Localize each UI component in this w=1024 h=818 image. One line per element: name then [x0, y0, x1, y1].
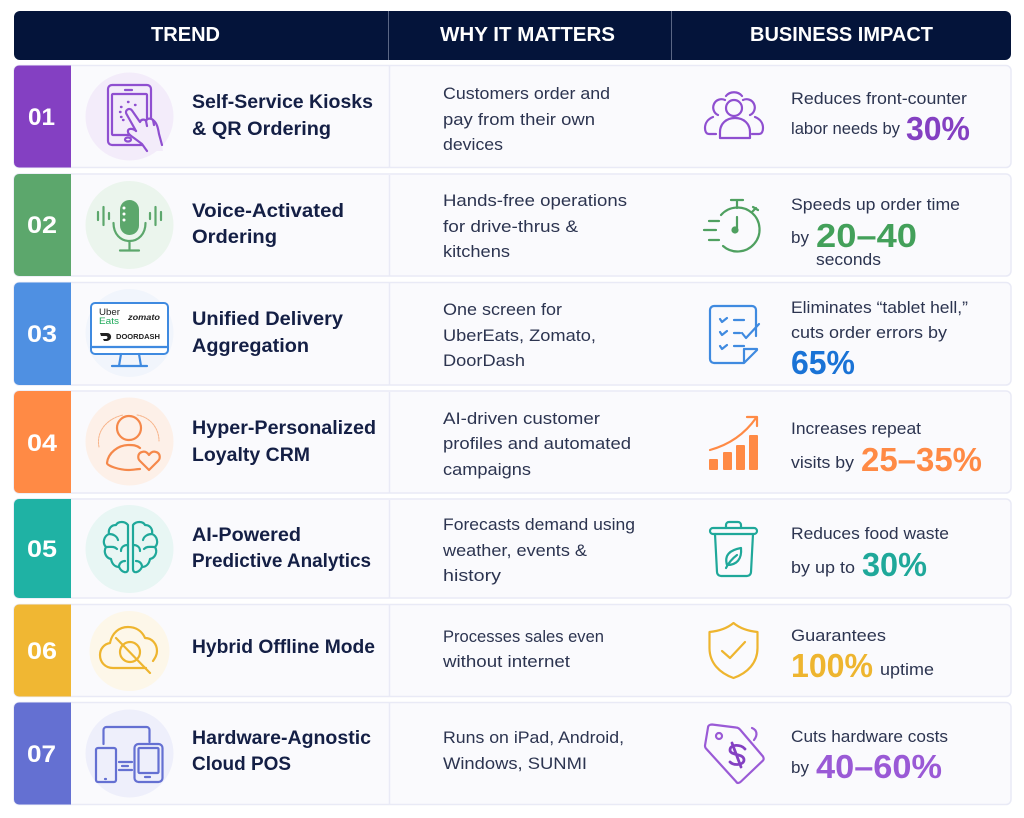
panel: row 02 voice-activated ordering: kitchens [443, 242, 510, 261]
panel: row 05 predictive analytics: AI-Powered [192, 524, 301, 546]
panel: row 03 unified delivery aggregation: Eliminates “tablet hell,” [791, 299, 968, 317]
panel: row 04 hyper-personalized loyalty: campaigns [443, 460, 531, 479]
panel: row 07 hardware-agnostic cloud pos: 40–60% [816, 748, 942, 785]
panel: row 06 hybrid offline mode: without internet [442, 652, 570, 671]
panel: row 03 unified delivery aggregation: DoorDash [443, 351, 525, 370]
panel: row 06 hybrid offline mode [14, 604, 1011, 696]
panel: row 04 hyper-personalized loyalty: Hyper-Personalized [192, 417, 376, 439]
panel: row 04 hyper-personalized loyalty: AI-driven customer [443, 409, 600, 428]
panel: row 03 unified delivery aggregation: 65% [791, 344, 855, 381]
panel: row 04 hyper-personalized loyalty: 04 [27, 430, 58, 457]
icon: trash bin with leaf [710, 522, 757, 576]
panel: row 06 hybrid offline mode: Guarantees [791, 627, 886, 645]
panel: row 05 predictive analytics: Predictive Analytics [192, 550, 371, 572]
icon: price tag with dollar [705, 724, 764, 783]
panel: row 04 hyper-personalized loyalty: profiles and automated [443, 434, 631, 453]
panel: row 02 voice-activated ordering: Ordering [192, 226, 277, 248]
panel: row 07 hardware-agnostic cloud pos: Windows, SUNMI [443, 754, 587, 773]
icon: customer with heart [86, 398, 174, 486]
panel: row 03 unified delivery aggregation: Unified Delivery [192, 308, 343, 330]
panel: row 05 predictive analytics: history [443, 566, 502, 585]
panel: row 04 hyper-personalized loyalty: 25–35% [861, 441, 982, 478]
header bar: TREND [151, 24, 220, 46]
panel: row 02 voice-activated ordering [14, 174, 1011, 276]
icon: microphone [86, 181, 174, 269]
panel: row 06 hybrid offline mode: Hybrid Offline Mode [192, 636, 375, 658]
panel: row 03 unified delivery aggregation: cuts order errors by [791, 324, 948, 342]
panel: row 05 predictive analytics: Forecasts demand using [443, 515, 635, 534]
panel: row 02 voice-activated ordering: by [791, 229, 810, 247]
icon: devices [86, 710, 174, 798]
panel: row 01 self-service kiosks: & QR Ordering [192, 118, 331, 140]
panel: row 03 unified delivery aggregation: One screen for [443, 300, 562, 319]
panel: row 04 hyper-personalized loyalty: Increases repeat [791, 420, 921, 438]
icon: monitor with delivery apps: Uber [99, 307, 120, 318]
icon: monitor with delivery apps: Eats [99, 316, 119, 327]
panel: row 03 unified delivery aggregation: Aggregation [192, 335, 309, 357]
icon: checklist [710, 306, 759, 363]
panel: row 01 self-service kiosks: Self-Service Kiosks [192, 91, 373, 113]
panel: row 02 voice-activated ordering: for drive-thrus & [443, 217, 579, 236]
header bar: WHY IT MATTERS [440, 24, 615, 46]
panel: row 05 predictive analytics: Reduces food waste [791, 525, 949, 543]
panel: row 01 self-service kiosks: 01 [28, 104, 55, 131]
panel: row 05 predictive analytics: weather, events & [442, 541, 588, 560]
panel: row 07 hardware-agnostic cloud pos: Cuts hardware costs [791, 728, 948, 746]
icon: growth bar chart [709, 417, 758, 470]
panel: row 07 hardware-agnostic cloud pos: by [791, 759, 810, 777]
panel: row 04 hyper-personalized loyalty [14, 391, 1011, 493]
panel: row 06 hybrid offline mode: Processes sales even [443, 627, 604, 646]
panel: row 02 voice-activated ordering: 02 [27, 212, 57, 239]
panel: row 01 self-service kiosks: pay from their own [443, 110, 595, 129]
panel: row 02 voice-activated ordering: Hands-free operations [443, 191, 627, 210]
panel: row 07 hardware-agnostic cloud pos: Cloud POS [192, 753, 291, 775]
panel: row 05 predictive analytics: 05 [27, 536, 57, 563]
panel: row 06 hybrid offline mode: 06 [27, 638, 57, 665]
icon: monitor with delivery apps: zomato [127, 312, 160, 322]
panel: row 05 predictive analytics: 30% [862, 546, 927, 583]
panel: row 07 hardware-agnostic cloud pos: Hardware-Agnostic [192, 727, 371, 749]
panel: row 03 unified delivery aggregation [14, 282, 1011, 385]
header bar [14, 11, 1011, 60]
panel: row 06 hybrid offline mode: uptime [880, 661, 934, 679]
panel: row 02 voice-activated ordering: Voice-Activated [192, 200, 344, 222]
panel: row 01 self-service kiosks: Reduces front-counter [791, 90, 968, 108]
panel: row 06 hybrid offline mode: 100% [791, 647, 873, 684]
icon: tablet with tapping hand [86, 72, 174, 160]
panel: row 04 hyper-personalized loyalty: visits by [791, 454, 855, 472]
panel: row 03 unified delivery aggregation: UberEats, Zomato, [443, 326, 596, 345]
panel: row 01 self-service kiosks: 30% [906, 110, 970, 147]
panel: row 01 self-service kiosks [14, 66, 1011, 168]
icon: shield with check [710, 623, 758, 678]
panel: row 07 hardware-agnostic cloud pos: 07 [27, 741, 56, 768]
panel: row 05 predictive analytics: by up to [791, 559, 855, 577]
icon: monitor with delivery apps: DOORDASH [116, 332, 160, 341]
panel: row 02 voice-activated ordering: 20–40 [816, 217, 917, 254]
panel: row 02 voice-activated ordering: Speeds up order time [791, 196, 960, 214]
icon: brain [86, 505, 174, 593]
panel: row 04 hyper-personalized loyalty: Loyalty CRM [192, 444, 310, 466]
panel: row 01 self-service kiosks: Customers order and [443, 84, 610, 103]
panel: row 01 self-service kiosks: devices [443, 135, 503, 154]
icon: cloud with crossed-out connection [90, 611, 170, 691]
panel: row 01 self-service kiosks: labor needs by [791, 120, 901, 138]
header bar: BUSINESS IMPACT [750, 24, 933, 46]
icon: stopwatch [704, 200, 760, 251]
panel: row 05 predictive analytics [14, 499, 1011, 598]
panel: row 02 voice-activated ordering: seconds [816, 251, 881, 269]
panel: row 07 hardware-agnostic cloud pos: Runs on iPad, Android, [443, 728, 624, 747]
icon: monitor with delivery apps [86, 289, 174, 377]
panel: row 07 hardware-agnostic cloud pos [14, 702, 1011, 804]
panel: row 03 unified delivery aggregation: 03 [27, 321, 57, 348]
icon: team of people [705, 92, 763, 138]
